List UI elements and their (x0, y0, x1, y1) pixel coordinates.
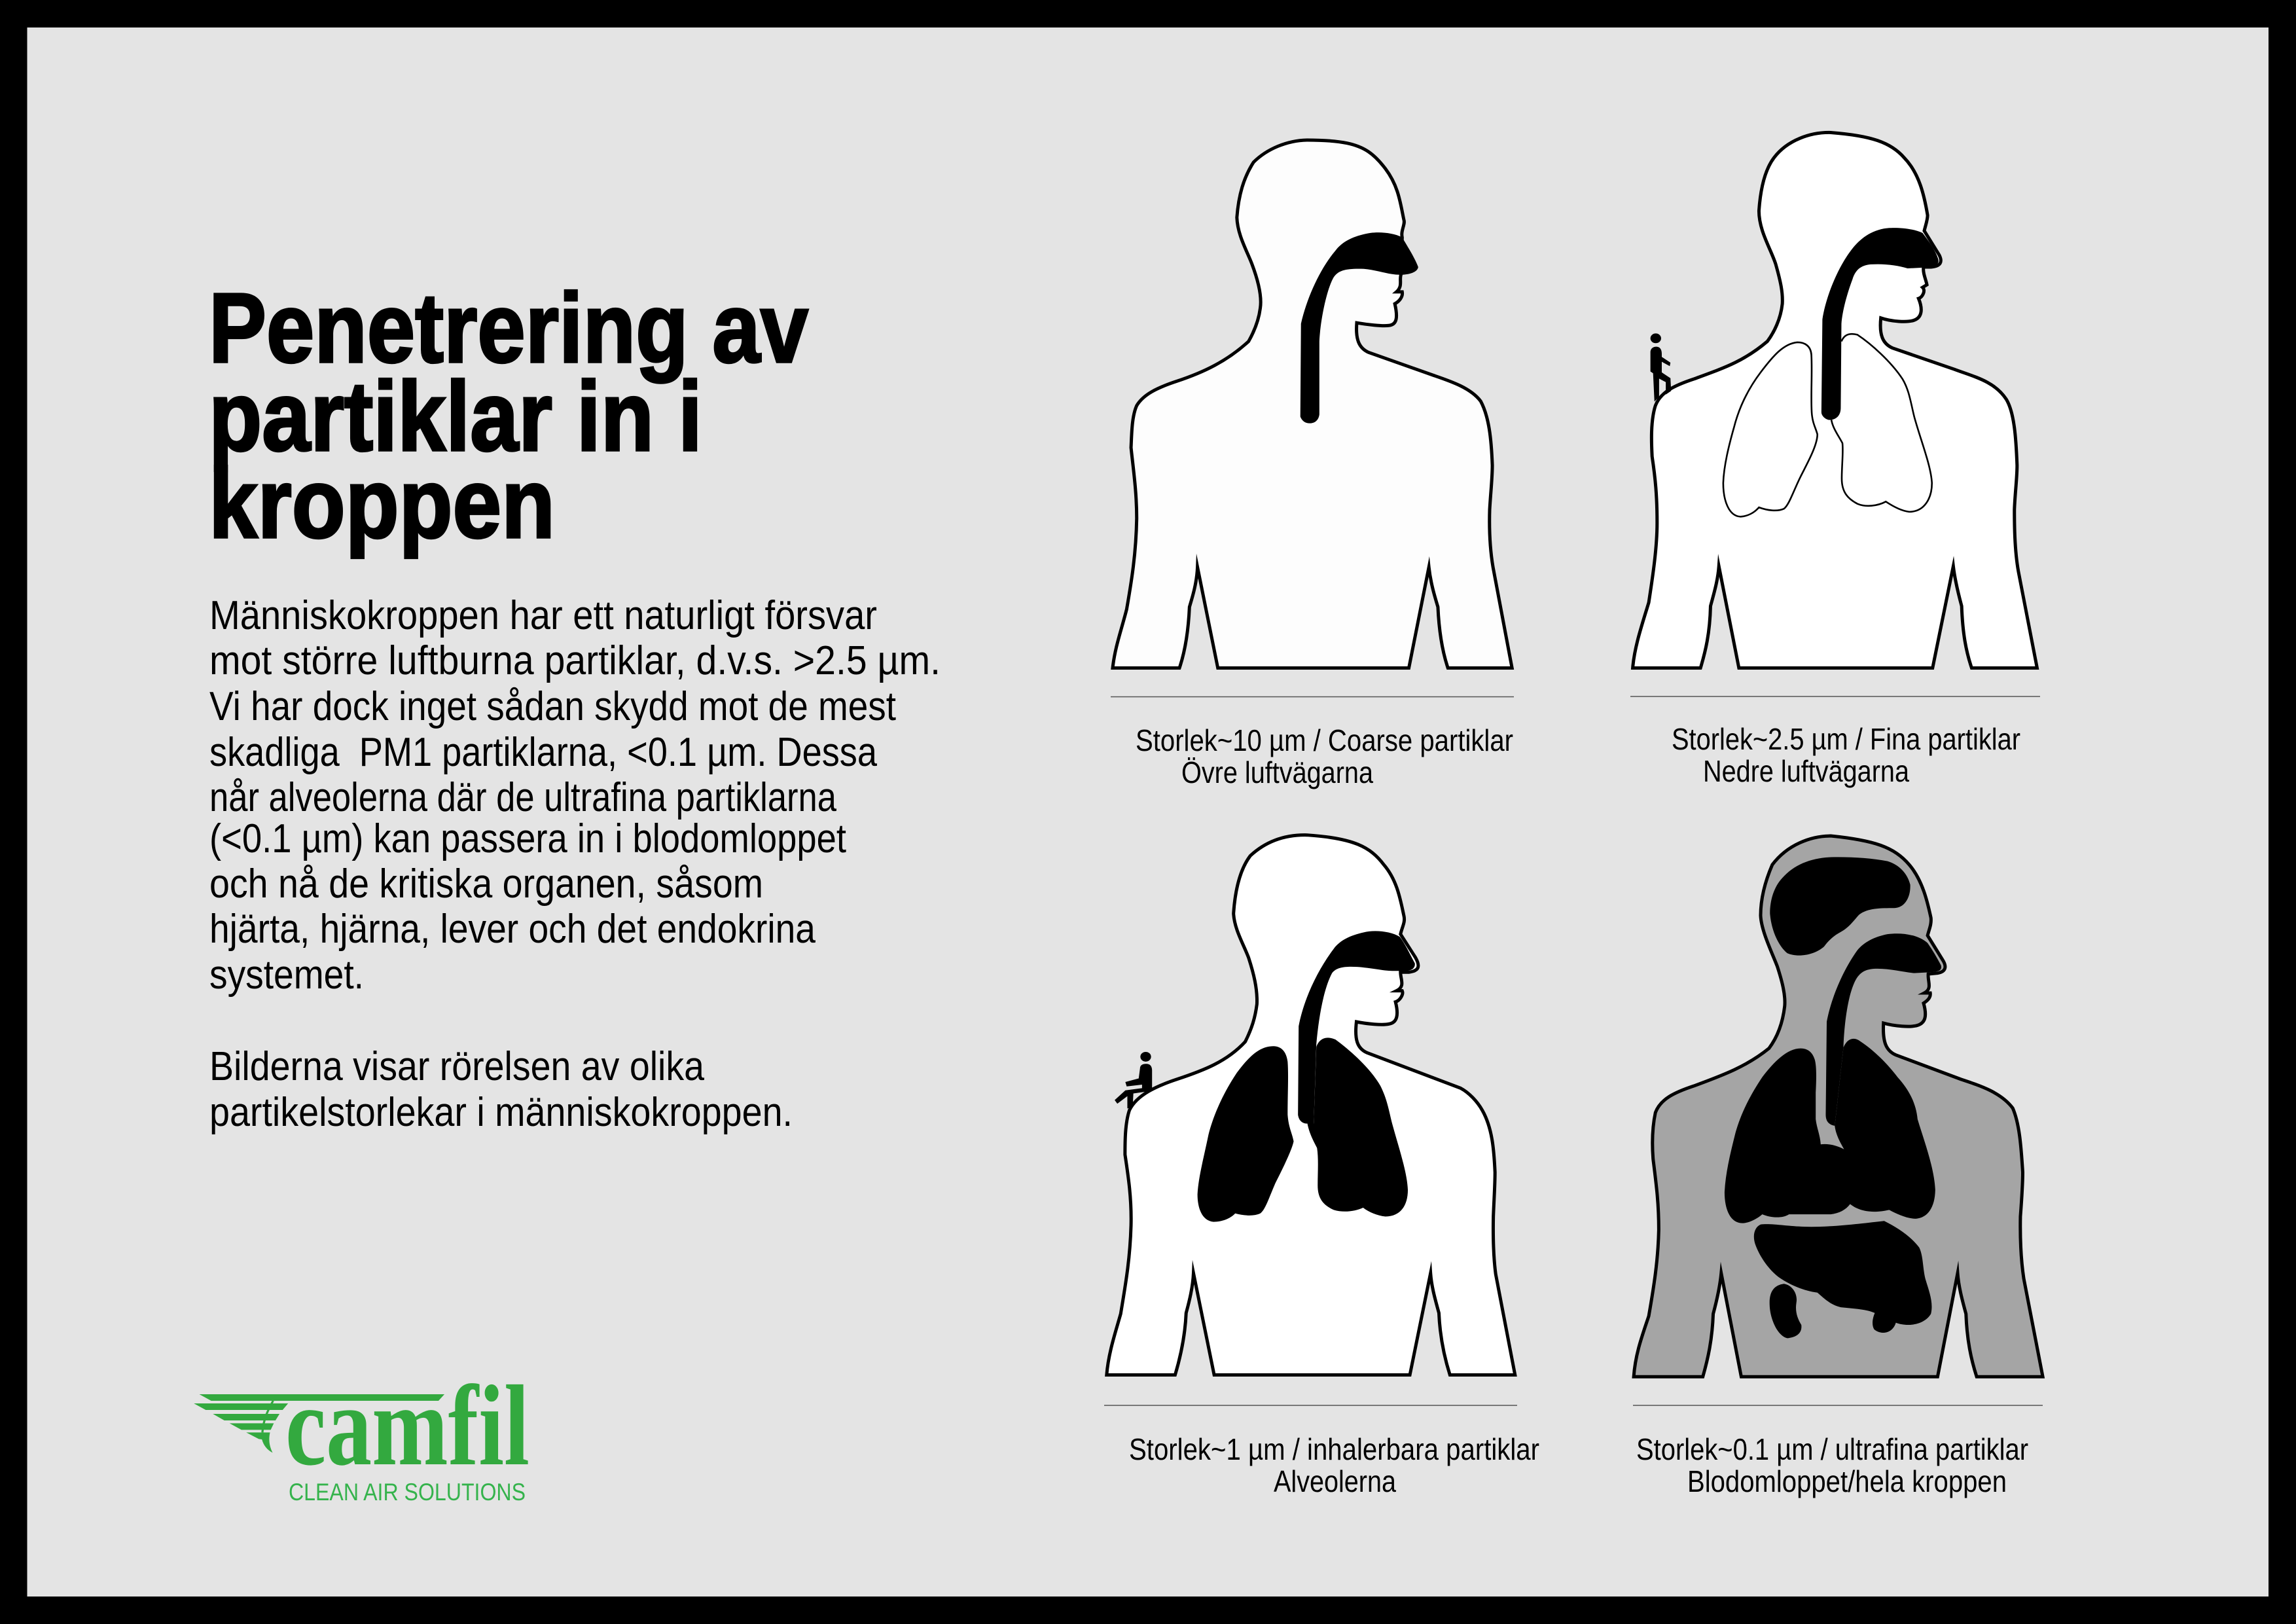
title (209, 272, 808, 558)
title: partiklar in i (209, 361, 702, 471)
intro text block (209, 593, 941, 1135)
caption: Nedre luftvägarna (1703, 754, 1909, 788)
caption (1636, 1432, 2028, 1498)
caption (1129, 1432, 1539, 1498)
divider (1630, 696, 2040, 697)
divider (1104, 1405, 1517, 1406)
brain (1770, 857, 1910, 956)
intro text block: systemet. (209, 952, 364, 998)
intro text block: mot större luftburna partiklar, d.v.s. >2.5 µm. (209, 638, 941, 683)
icon: sitting person (1115, 1052, 1152, 1109)
intro text block: Människokroppen har ett naturligt försvar (209, 593, 877, 638)
body figure with airway and lung outlines (1633, 132, 2037, 668)
logo wordmark: camfil (285, 1362, 529, 1490)
kidney (1770, 1284, 1801, 1338)
intro text block: Bilderna visar rörelsen av olika (209, 1044, 704, 1089)
intro text block: når alveolerna där de ultrafina partiklarna (209, 775, 836, 820)
divider (1111, 696, 1514, 698)
icon: walking person (1651, 333, 1671, 402)
caption: Storlek~1 µm / inhalerbara partiklar (1129, 1432, 1539, 1466)
intro text block: Vi har dock inget sådan skydd mot de mest (209, 684, 896, 729)
caption (1672, 722, 2020, 788)
airway (1825, 933, 1941, 1126)
grey body figure with black organs (1634, 836, 2043, 1377)
body figure with airway and black lungs (1107, 835, 1515, 1375)
caption: Blodomloppet/hela kroppen (1687, 1464, 2007, 1498)
body figure with upper airway (1113, 140, 1512, 668)
intro text block: och nå de kritiska organen, såsom (209, 861, 763, 907)
caption: Övre luftvägarna (1181, 755, 1373, 789)
caption (1136, 723, 1513, 789)
caption: Storlek~10 µm / Coarse partiklar (1136, 723, 1513, 757)
intro text block: (<0.1 µm) kan passera in i blodomloppet (209, 816, 846, 861)
panel: 2.5 µm lower airways (1630, 132, 2040, 788)
intro text block: skadliga PM1 partiklarna, <0.1 µm. Dessa (209, 730, 877, 775)
panel: 1 µm alveoli (1104, 835, 1539, 1498)
logo wing icon (194, 1394, 444, 1453)
caption: Storlek~2.5 µm / Fina partiklar (1672, 722, 2020, 756)
panel: 10 µm upper airways (1111, 140, 1514, 789)
divider (1633, 1405, 2043, 1406)
caption: Alveolerna (1274, 1464, 1396, 1498)
logo tagline: CLEAN AIR SOLUTIONS (289, 1479, 526, 1506)
title: kroppen (209, 448, 555, 558)
panel: 0.1 µm whole body (1633, 836, 2043, 1498)
title: Penetrering av (209, 272, 808, 383)
abdominal organs (1754, 1221, 1931, 1333)
intro text block: hjärta, hjärna, lever och det endokrina (209, 907, 816, 952)
intro text block: partikelstorlekar i människokroppen. (209, 1090, 793, 1135)
logo: camfil (194, 1362, 529, 1506)
caption: Storlek~0.1 µm / ultrafina partiklar (1636, 1432, 2028, 1466)
lungs and heart (1725, 1039, 1935, 1223)
